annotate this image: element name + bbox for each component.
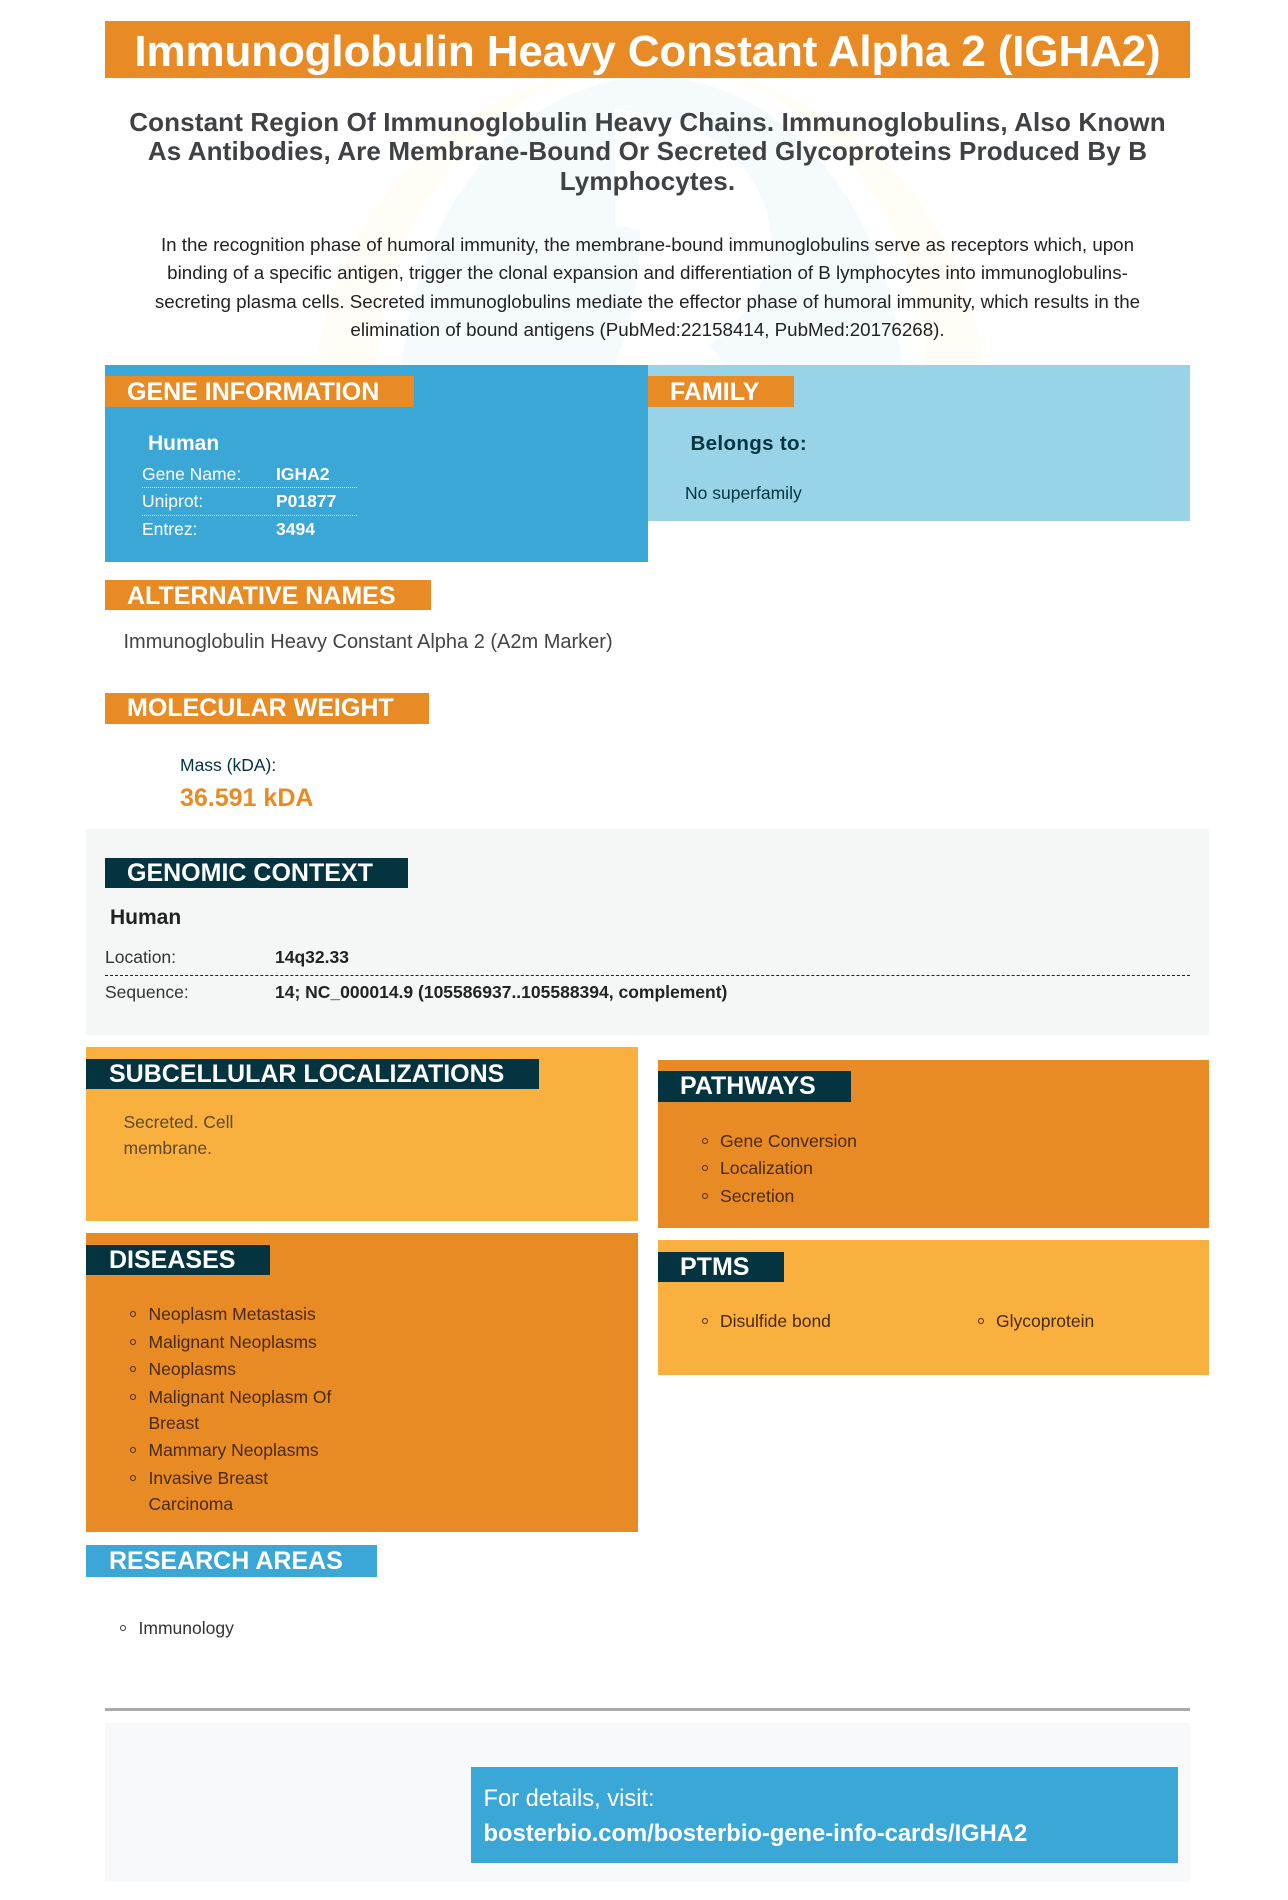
- heading: family: FAMILY: [670, 378, 759, 406]
- heading: diseases: DISEASES: [109, 1246, 235, 1274]
- description paragraph: secreting plasma cells. Secreted immunoglobulins mediate the effector phase of humoral immunity, which results in the: [155, 291, 1140, 312]
- subtitle: Lymphocytes.: [560, 166, 735, 196]
- research areas list: Immunology: [138, 1618, 234, 1638]
- heading: pathways: PATHWAYS: [680, 1072, 816, 1100]
- gene info rows: 3494: [276, 518, 315, 538]
- localization text: membrane.: [124, 1138, 212, 1158]
- alternative names text: Immunoglobulin Heavy Constant Alpha 2 (A2m Marker): [124, 630, 613, 652]
- ptms list: Disulfide bond: [720, 1310, 831, 1330]
- diseases list: Malignant Neoplasm Of: [148, 1386, 331, 1406]
- diseases list: Neoplasms: [148, 1359, 236, 1379]
- heading: ptms: [658, 1252, 784, 1282]
- pathways list: Gene Conversion: [720, 1130, 857, 1150]
- heading: pathways: [658, 1071, 851, 1102]
- description paragraph: binding of a specific antigen, trigger the clonal expansion and differentiation of B lymphocytes into immunoglobulins-: [167, 262, 1128, 283]
- species label: Human: [110, 906, 181, 929]
- panel: footer: [105, 1723, 1190, 1882]
- heading: subcellular localizations: SUBCELLULAR LOCALIZATIONS: [109, 1060, 504, 1088]
- gene info rows: Entrez:: [142, 518, 197, 538]
- description paragraph: elimination of bound antigens (PubMed:22158414, PubMed:20176268).: [350, 319, 945, 340]
- heading: family: [648, 376, 794, 407]
- panel: ptms: [658, 1240, 1209, 1375]
- heading: diseases: [86, 1245, 270, 1275]
- pathways list: Localization: [720, 1158, 813, 1178]
- belongs to label: Belongs to:: [690, 432, 807, 454]
- gene info rows: IGHA2: [276, 464, 329, 484]
- call to action text: For details, visit:: [484, 1786, 655, 1812]
- title banner: Immunoglobulin Heavy Constant Alpha 2 (IGHA2): [134, 27, 1161, 76]
- background watermark logo: [317, 78, 983, 365]
- description paragraph: In the recognition phase of humoral immunity, the membrane-bound immunoglobulins serve as receptors which, upon: [161, 234, 1134, 255]
- family value: No superfamily: [685, 483, 802, 503]
- location row: Location:: [105, 946, 176, 966]
- localization text: Secreted. Cell: [124, 1112, 233, 1132]
- gene info rows: Gene Name:: [142, 464, 241, 484]
- ptms list: [702, 1310, 1094, 1330]
- mass label: Mass (kDA):: [180, 755, 276, 775]
- gene info rows: [142, 464, 357, 538]
- diseases list: Invasive Breast: [148, 1468, 268, 1488]
- heading: research areas: RESEARCH AREAS: [109, 1547, 343, 1575]
- subtitle: Constant Region Of Immunoglobulin Heavy Chains. Immunoglobulins, Also Known: [129, 107, 1166, 137]
- species label: Human: [148, 432, 219, 454]
- panel: pathways: [658, 1060, 1209, 1228]
- diseases list: Malignant Neoplasms: [148, 1332, 317, 1352]
- gene info rows: Uniprot:: [142, 490, 203, 510]
- gene info rows: P01877: [276, 490, 336, 510]
- panel: gene information: [105, 365, 648, 562]
- subtitle: As Antibodies, Are Membrane-Bound Or Secreted Glycoproteins Produced By B: [148, 136, 1147, 166]
- callout: details link: [471, 1767, 1178, 1863]
- ptms list: Glycoprotein: [996, 1310, 1094, 1330]
- diseases list: [130, 1304, 332, 1514]
- mass value: 36.591 kDA: [180, 784, 313, 812]
- sequence row: Sequence:: [105, 982, 189, 1002]
- diseases list: Mammary Neoplasms: [148, 1440, 319, 1460]
- panel: genomic context: [86, 829, 1209, 1035]
- description paragraph: [155, 234, 1140, 340]
- pathways list: [702, 1130, 857, 1206]
- subtitle: [129, 107, 1166, 196]
- panel: subcellular localizations: [86, 1047, 638, 1221]
- panel: diseases: [86, 1233, 638, 1532]
- localization text: [124, 1112, 233, 1158]
- sequence row: 14; NC_000014.9 (105586937..105588394, complement): [275, 982, 727, 1002]
- pathways list: Secretion: [720, 1186, 794, 1206]
- url text: bosterbio.com/bosterbio-gene-info-cards/IGHA2: [484, 1820, 1027, 1847]
- location row: 14q32.33: [275, 946, 349, 966]
- heading: gene information: GENE INFORMATION: [127, 378, 379, 406]
- heading: genomic context: GENOMIC CONTEXT: [127, 859, 373, 887]
- heading: alternative names: ALTERNATIVE NAMES: [127, 582, 396, 610]
- panel: family: [648, 365, 1190, 521]
- diseases list: Neoplasm Metastasis: [148, 1304, 316, 1324]
- diseases list: Breast: [148, 1413, 199, 1433]
- heading: molecular weight: MOLECULAR WEIGHT: [127, 694, 394, 722]
- heading: ptms: PTMS: [680, 1253, 749, 1281]
- location row: [105, 946, 349, 966]
- diseases list: Carcinoma: [148, 1494, 233, 1514]
